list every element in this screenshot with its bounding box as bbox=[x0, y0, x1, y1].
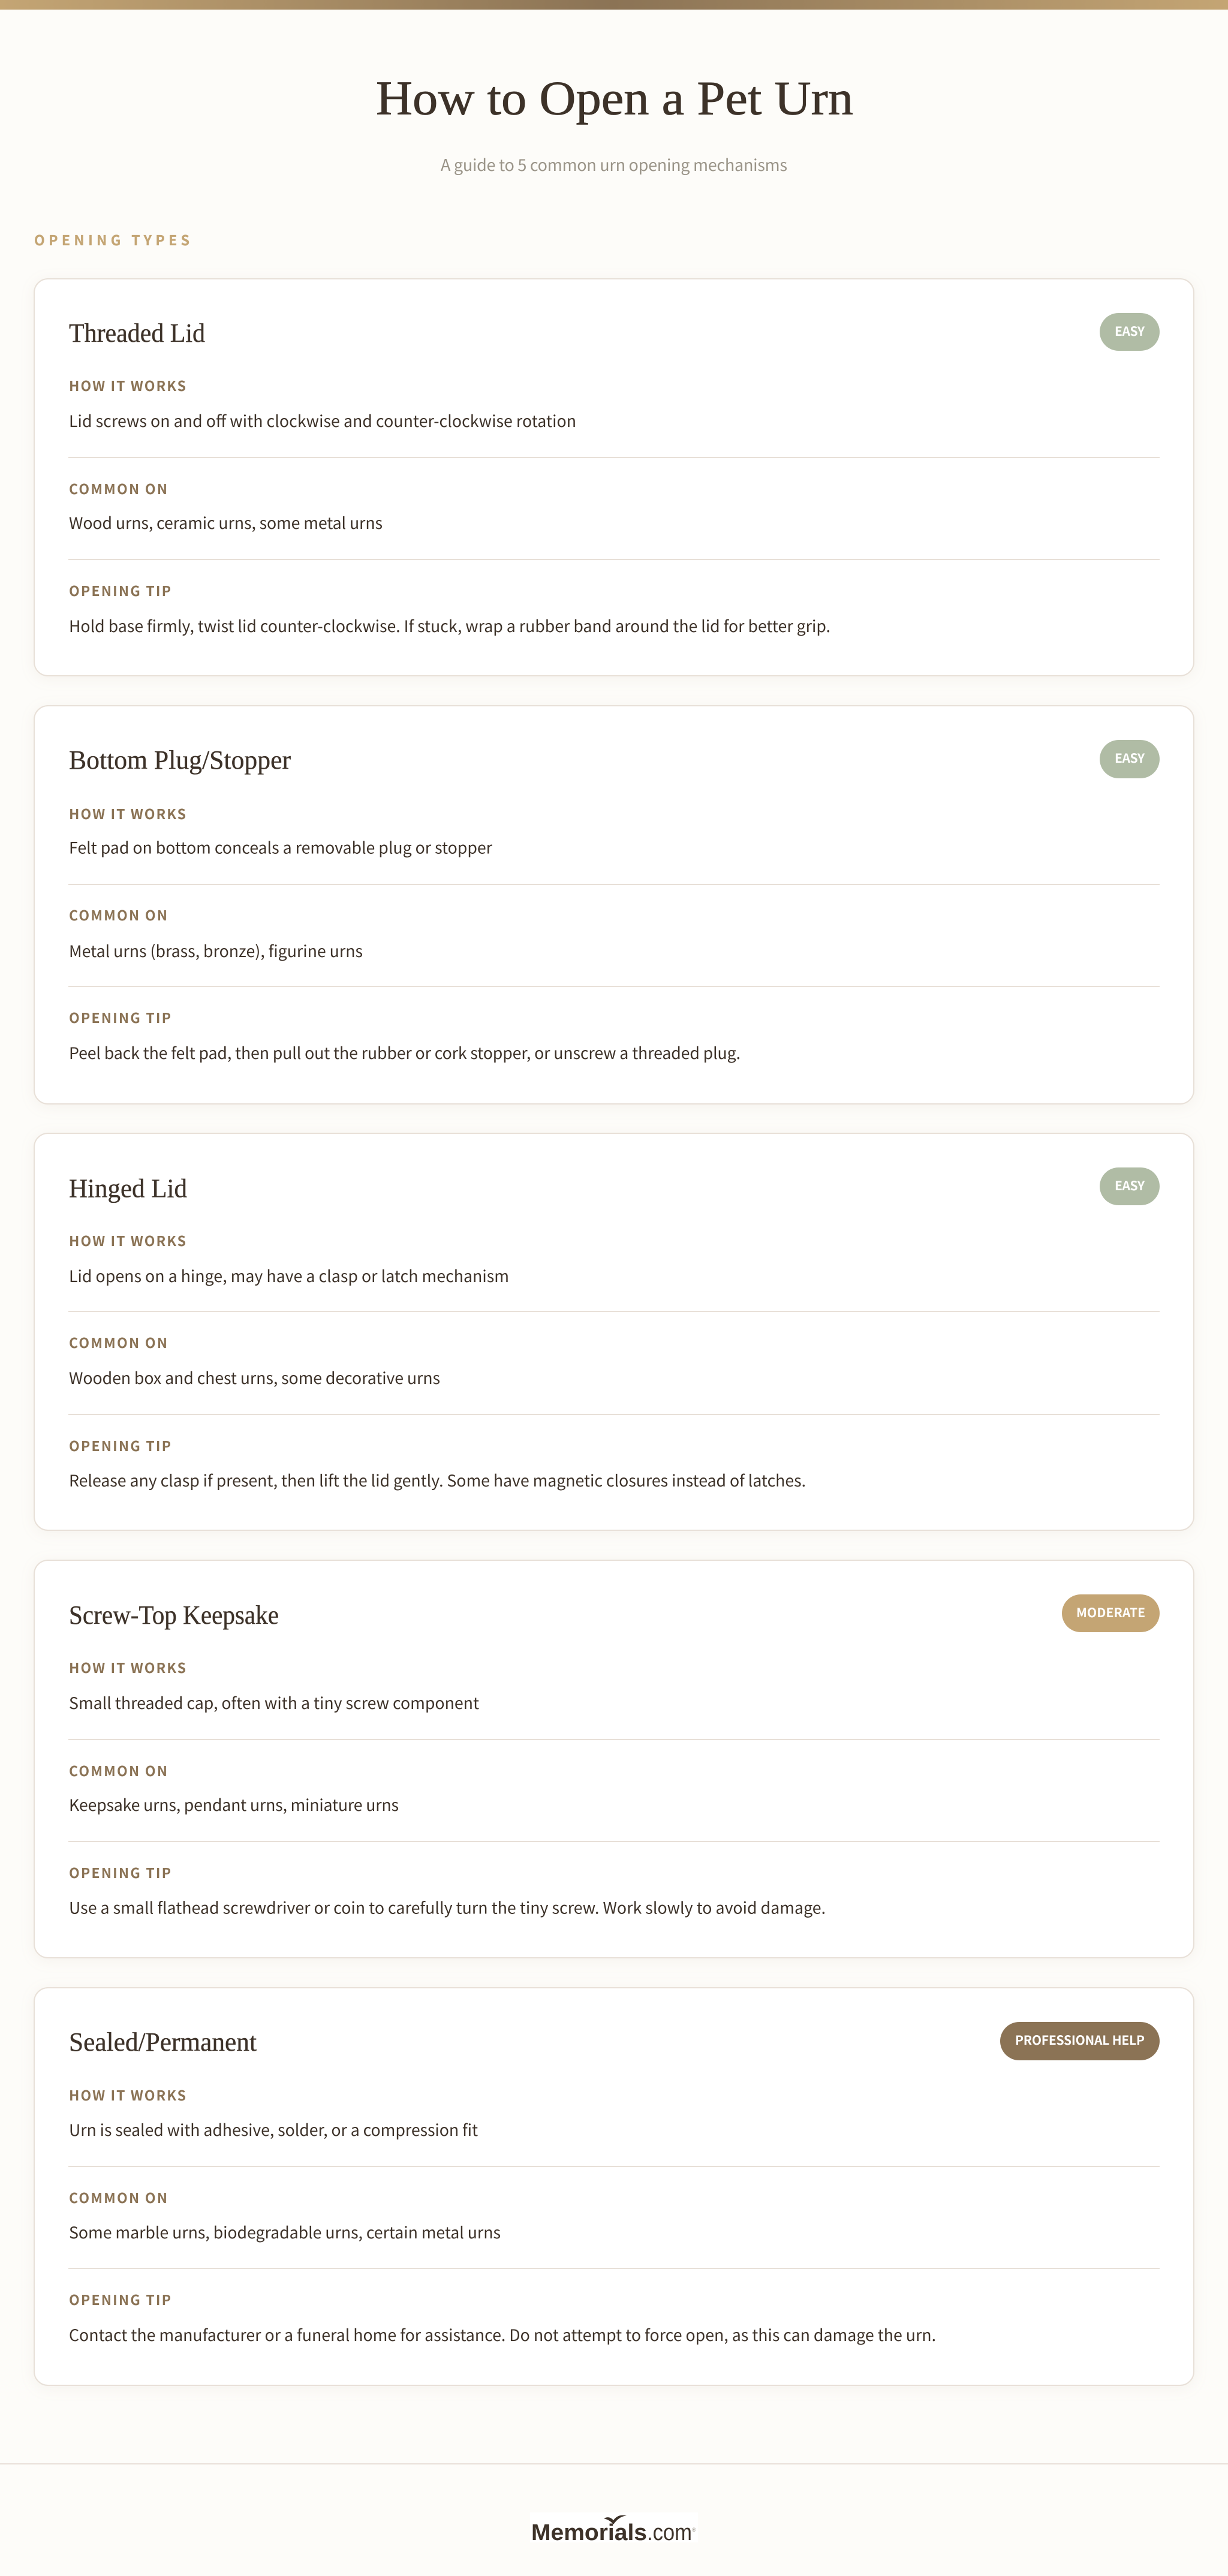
opening tip: OPENING TIP bbox=[69, 1435, 171, 1455]
footer logo: Memorials.com: .com bbox=[647, 2520, 692, 2545]
panel: Hinged Lid bbox=[34, 1133, 1194, 1530]
card title: Threaded Lid bbox=[69, 318, 205, 348]
how it works: Small threaded cap, often with a tiny screw component bbox=[69, 1690, 479, 1714]
panel: Threaded Lid bbox=[34, 279, 1194, 676]
common on bbox=[69, 904, 363, 962]
common on: Metal urns (brass, bronze), figurine urns bbox=[69, 938, 363, 962]
how it works bbox=[69, 1230, 509, 1287]
card background bbox=[34, 1560, 1194, 1958]
how it works: Lid screws on and off with clockwise and counter-clockwise rotation bbox=[69, 408, 576, 432]
subtitle: A guide to 5 common urn opening mechanisms bbox=[441, 152, 787, 176]
how it works: HOW IT WORKS bbox=[69, 1230, 186, 1250]
badge: moderate bbox=[1062, 1594, 1160, 1632]
badge: moderate: MODERATE bbox=[1076, 1603, 1145, 1621]
badge: easy bbox=[1100, 1167, 1160, 1205]
opening tip bbox=[69, 1007, 741, 1064]
opening tip: OPENING TIP bbox=[69, 580, 171, 600]
badge: easy bbox=[1100, 313, 1160, 351]
opening tip: OPENING TIP bbox=[69, 1862, 171, 1882]
badge: professional help: PROFESSIONAL HELP bbox=[1015, 2031, 1145, 2049]
opening tip bbox=[69, 1862, 826, 1919]
badge: professional help bbox=[1000, 2022, 1160, 2060]
card background bbox=[34, 1133, 1194, 1530]
how it works: HOW IT WORKS bbox=[69, 803, 186, 823]
common on: Wooden box and chest urns, some decorative urns bbox=[69, 1365, 440, 1389]
section label: opening types: OPENING TYPES bbox=[34, 229, 189, 249]
opening tip: Contact the manufacturer or a funeral home for assistance. Do not attempt to force open, as this can damage the urn. bbox=[69, 2322, 936, 2346]
how it works: Lid opens on a hinge, may have a clasp or latch mechanism bbox=[69, 1263, 509, 1287]
badge: easy bbox=[1100, 740, 1160, 778]
card title: Sealed/Permanent bbox=[69, 2027, 257, 2057]
common on bbox=[69, 1332, 440, 1389]
footer logo: Memorials.com: ® bbox=[692, 2527, 696, 2533]
badge: easy: EASY bbox=[1115, 1176, 1145, 1194]
common on bbox=[69, 1760, 399, 1816]
opening tip: Use a small flathead screwdriver or coin to carefully turn the tiny screw. Work slowly to avoid damage. bbox=[69, 1895, 826, 1919]
card background bbox=[34, 279, 1194, 676]
opening tip: Hold base firmly, twist lid counter-clockwise. If stuck, wrap a rubber band around the lid for better grip. bbox=[69, 613, 830, 637]
how it works: Felt pad on bottom conceals a removable plug or stopper bbox=[69, 835, 493, 859]
how it works: HOW IT WORKS bbox=[69, 2084, 186, 2105]
opening tip: OPENING TIP bbox=[69, 1007, 171, 1027]
opening tip: Release any clasp if present, then lift the lid gently. Some have magnetic closures instead of latches. bbox=[69, 1468, 806, 1491]
common on: COMMON ON bbox=[69, 904, 167, 925]
opening tip bbox=[69, 580, 830, 637]
card title: Hinged Lid bbox=[69, 1174, 187, 1203]
common on: COMMON ON bbox=[69, 478, 167, 498]
how it works bbox=[69, 1657, 479, 1714]
how it works bbox=[69, 2084, 478, 2141]
common on: Some marble urns, biodegradable urns, certain metal urns bbox=[69, 2220, 501, 2243]
card background bbox=[34, 1988, 1194, 2385]
card background bbox=[34, 706, 1194, 1104]
opening tip bbox=[69, 2289, 936, 2346]
panel: Sealed/Permanent bbox=[34, 1988, 1194, 2385]
how it works bbox=[69, 803, 493, 859]
panel: Screw-Top Keepsake bbox=[34, 1560, 1194, 1958]
common on: COMMON ON bbox=[69, 1760, 167, 1780]
common on: COMMON ON bbox=[69, 2187, 167, 2207]
common on bbox=[69, 2187, 501, 2243]
footer logo: Memorials.com: Memorials bbox=[531, 2520, 647, 2545]
common on: Keepsake urns, pendant urns, miniature urns bbox=[69, 1792, 399, 1816]
panel: Bottom Plug/Stopper bbox=[34, 706, 1194, 1104]
title: How to Open a Pet Urn bbox=[376, 72, 853, 125]
opening tip bbox=[69, 1435, 806, 1491]
badge: easy: EASY bbox=[1115, 749, 1145, 767]
how it works: Urn is sealed with adhesive, solder, or a compression fit bbox=[69, 2117, 478, 2141]
top gradient bar bbox=[0, 0, 1228, 10]
card title: Screw-Top Keepsake bbox=[69, 1600, 279, 1630]
common on: COMMON ON bbox=[69, 1332, 167, 1352]
how it works bbox=[69, 375, 576, 432]
card title: Bottom Plug/Stopper bbox=[69, 745, 291, 775]
common on bbox=[69, 478, 383, 534]
badge: easy: EASY bbox=[1115, 322, 1145, 340]
common on: Wood urns, ceramic urns, some metal urns bbox=[69, 510, 383, 534]
opening tip: OPENING TIP bbox=[69, 2289, 171, 2309]
how it works: HOW IT WORKS bbox=[69, 375, 186, 395]
opening tip: Peel back the felt pad, then pull out the rubber or cork stopper, or unscrew a threaded plug. bbox=[69, 1040, 741, 1064]
how it works: HOW IT WORKS bbox=[69, 1657, 186, 1677]
footer logo: Memorials.com bbox=[530, 2512, 698, 2545]
